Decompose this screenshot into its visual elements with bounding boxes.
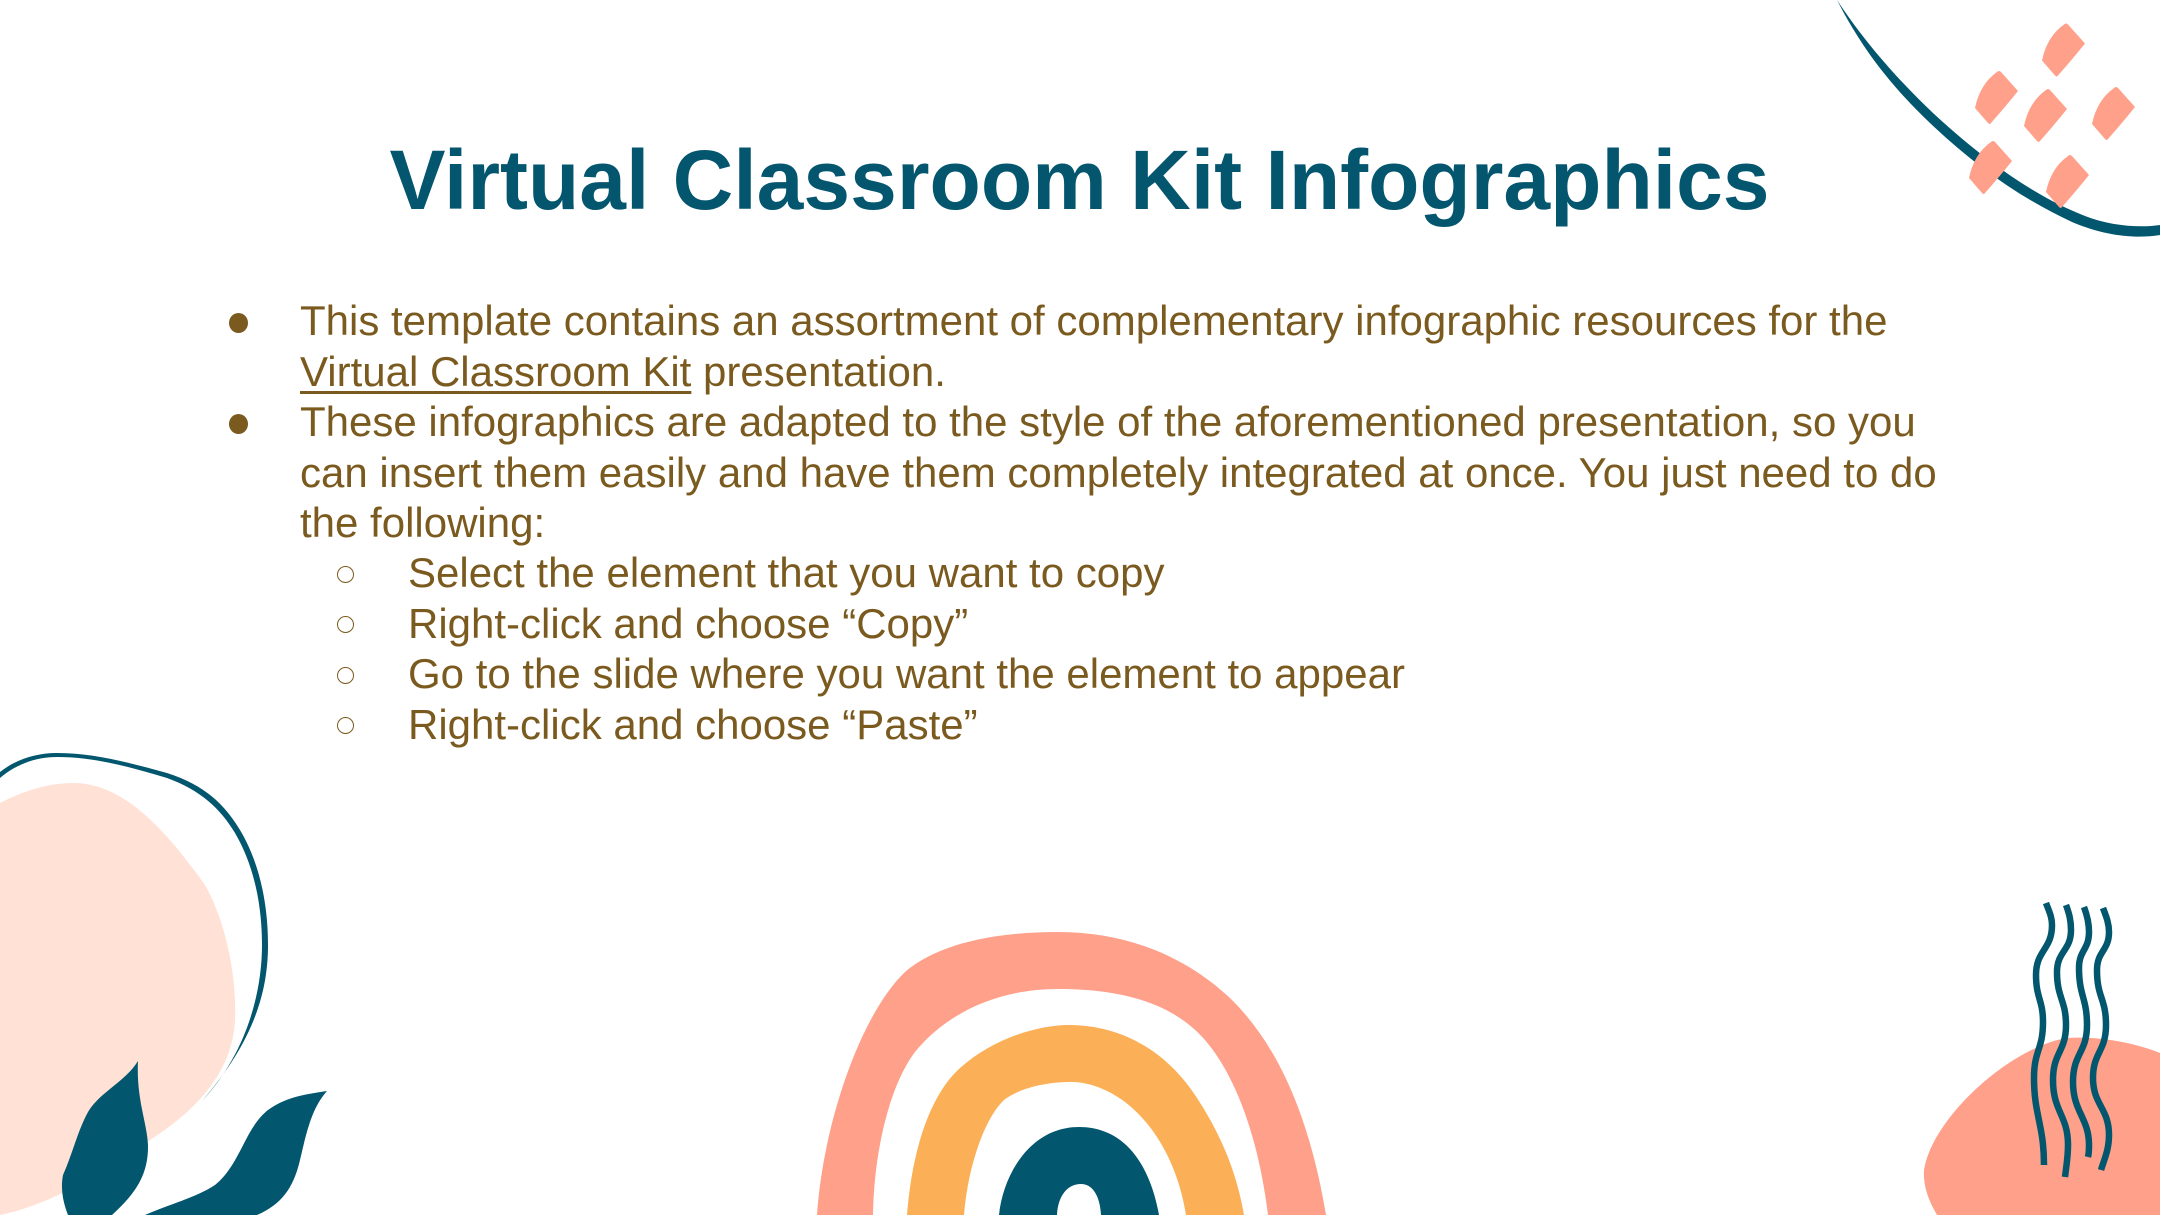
bottom-right coral blob: [1924, 1038, 2160, 1215]
top-right curved line: [1837, 0, 2160, 237]
sub-bullet three text: Go to the slide where you want the element to appear: [408, 650, 1405, 697]
title: Virtual Classroom Kit Infographics: [389, 133, 1770, 227]
sub-bullet four text: Right-click and choose “Paste”: [408, 701, 978, 748]
bullet one text: This template contains an assortment of complementary infographic resources for the: [300, 297, 1887, 344]
bottom-left leaf two: [145, 1091, 327, 1215]
sub-bullet one: [337, 566, 354, 583]
rainbow: [817, 932, 1326, 1215]
top-right diamond cluster: [1969, 24, 2135, 208]
bullet two text: [300, 398, 1937, 546]
sub-bullet one text: Select the element that you want to copy: [408, 549, 1164, 596]
bottom-left blob outline: [0, 753, 268, 1101]
bullet two text: can insert them easily and have them completely integrated at once. You just need to do: [300, 449, 1937, 496]
rainbow middle orange arch: [907, 1025, 1244, 1215]
bottom-left peach blob: [0, 783, 235, 1215]
sub-bullet three: [337, 667, 354, 684]
bottom-right wavy lines: [2034, 903, 2109, 1177]
sub-bullet four: [337, 717, 354, 734]
bullet one text: [300, 297, 1887, 395]
rainbow outer pink arch: [817, 932, 1326, 1215]
sub-bullet two text: Right-click and choose “Copy”: [408, 600, 968, 647]
bullet two text: the following:: [300, 499, 545, 546]
bottom-left leaf one: [62, 1061, 148, 1215]
sub-bullet two: [337, 616, 354, 633]
bullet one: [229, 313, 248, 333]
bullet two: [229, 414, 248, 434]
bullet two text: These infographics are adapted to the style of the aforementioned presentation, so you: [300, 398, 1916, 445]
bullet one text: Virtual Classroom Kit presentation.: [300, 348, 946, 395]
rainbow inner teal arch: [999, 1127, 1159, 1215]
